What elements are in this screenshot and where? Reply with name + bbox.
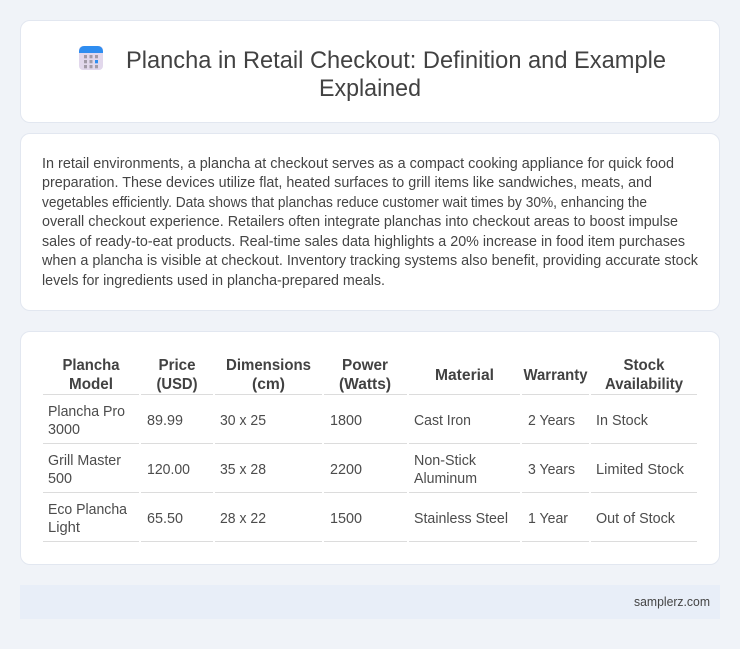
table row: Plancha Pro 3000: 2 Years	[528, 413, 575, 429]
text block: description: overall checkout experience. Retailers often integrate planchas into checkout areas to boost impulse	[42, 214, 678, 230]
text block: description: levels for ingredients used in plancha-prepared meals.	[42, 273, 385, 289]
table header: Power	[342, 357, 388, 374]
icon: calendar	[79, 46, 103, 70]
table row: Grill Master 500: 2200	[330, 462, 362, 478]
table row: Plancha Pro 3000: 3000	[48, 422, 80, 438]
table header: Dimensions	[226, 357, 311, 374]
table header: Price	[158, 357, 196, 374]
table header	[62, 357, 683, 393]
table row: Eco Plancha Light: 65.50	[147, 511, 183, 527]
table row: Grill Master 500: Grill Master	[48, 453, 121, 469]
table row: Eco Plancha Light: Light	[48, 520, 80, 536]
title: Explained	[319, 75, 421, 102]
table row: Eco Plancha Light: Stainless Steel	[414, 511, 508, 527]
table row: Eco Plancha Light: Out of Stock	[596, 511, 676, 527]
table row: Eco Plancha Light: Eco Plancha	[48, 502, 128, 518]
table row: Plancha Pro 3000: 89.99	[147, 413, 183, 429]
panel: title card	[20, 20, 720, 123]
text block: description	[41, 156, 699, 289]
text block: description: sales of ready-to-eat products. Real-time sales data highlights a 20% increase in food item purchases	[42, 234, 685, 250]
table header: Plancha	[62, 357, 120, 374]
table header: (Watts)	[339, 376, 391, 393]
table row: Eco Plancha Light: 28 x 22	[220, 511, 266, 527]
table row: Plancha Pro 3000: In Stock	[596, 413, 649, 429]
table row: Grill Master 500	[48, 453, 685, 487]
table header: (USD)	[156, 376, 198, 393]
table row: Plancha Pro 3000: 30 x 25	[220, 413, 266, 429]
table header: Availability	[605, 376, 683, 393]
table header: (cm)	[252, 376, 285, 393]
table row: Grill Master 500: Aluminum	[414, 471, 477, 487]
table header: Model	[69, 376, 113, 393]
table row: Grill Master 500: 500	[48, 471, 72, 487]
panel: table card	[20, 331, 720, 565]
table header: Material	[435, 367, 494, 384]
table row: Eco Plancha Light: 1500	[330, 511, 362, 527]
text block: description: vegetables efficiently. Data shows that planchas reduce customer wait times by 30%, enhancing the	[42, 195, 647, 211]
title: Plancha in Retail Checkout: Definition and Example	[126, 47, 666, 74]
table row: Plancha Pro 3000: 1800	[330, 413, 362, 429]
table row: Grill Master 500: Non-Stick	[414, 453, 477, 469]
table row: Eco Plancha Light	[48, 502, 676, 536]
table	[43, 357, 697, 542]
table row: Plancha Pro 3000	[48, 404, 649, 438]
table row: Grill Master 500: Limited Stock	[596, 462, 685, 478]
text block: description: when a plancha is visible at checkout. Inventory tracking systems also benefit, providing accurate stock	[41, 253, 699, 269]
panel: footer bar	[20, 585, 720, 619]
panel: description card	[20, 133, 720, 311]
table row: Grill Master 500: 120.00	[147, 462, 190, 478]
table row: Grill Master 500: 3 Years	[528, 462, 575, 478]
footer text: samplerz.com	[634, 594, 710, 609]
table header: Stock	[624, 357, 665, 374]
table row: Eco Plancha Light: 1 Year	[528, 511, 568, 527]
table header: Warranty	[524, 367, 588, 384]
table row: Plancha Pro 3000: Plancha Pro	[48, 404, 125, 420]
table row: Grill Master 500: 35 x 28	[220, 462, 266, 478]
text block: description: In retail environments, a plancha at checkout serves as a compact cooking appliance for quick food	[42, 156, 674, 172]
title	[126, 47, 666, 102]
text block: description: preparation. These devices utilize flat, heated surfaces to grill items like sandwiches, meats, and	[42, 175, 652, 191]
table row: Plancha Pro 3000: Cast Iron	[414, 413, 471, 429]
